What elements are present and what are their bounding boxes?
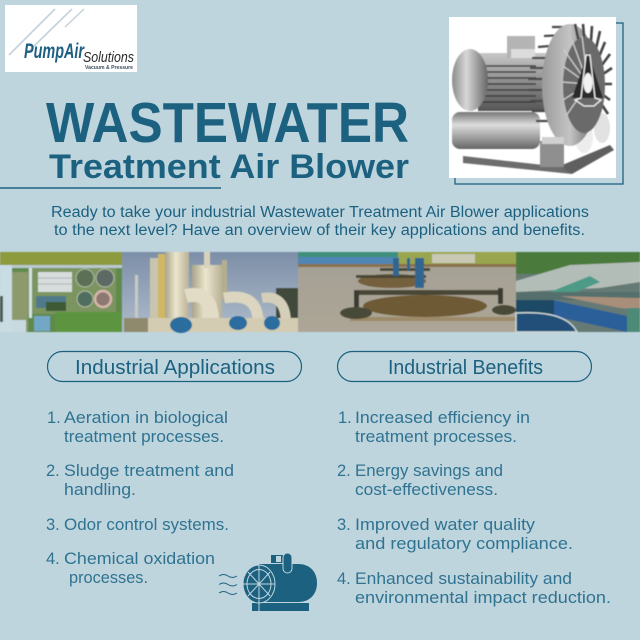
photo: aerial view of treatment plant: [0, 252, 122, 332]
logo: PumpAir Solutions: Vacuum & Pressure: [85, 65, 133, 71]
list: applications: Chemical oxidation: [64, 550, 215, 568]
heading: Industrial Benefits: Industrial Benefits: [388, 357, 543, 379]
title line: Treatment Air Blower: Treatment Air Blower: [49, 148, 409, 186]
photo strip: [0, 252, 640, 333]
fan housing side fins: [528, 27, 572, 121]
list: applications: 4.: [46, 550, 60, 568]
list: applications: 3.: [46, 516, 60, 534]
list: applications: treatment processes.: [64, 428, 224, 446]
list: applications: 1.: [47, 409, 61, 427]
icon: blower machine: [219, 553, 317, 611]
title line: WASTEWATER: WASTEWATER: [46, 91, 409, 155]
list: applications: Aeration in biological: [64, 409, 228, 427]
list: benefits: 2.: [337, 462, 351, 480]
list: benefits: 1.: [338, 409, 352, 427]
heading: Industrial Applications: Industrial Applications: [75, 357, 275, 379]
product photo: air blower: [449, 17, 623, 184]
list: benefits: Improved water quality: [355, 516, 536, 534]
intro paragraph: [51, 204, 589, 239]
list: benefits: Enhanced sustainability and: [355, 570, 572, 588]
list: applications: [46, 409, 234, 587]
photo: clarifier tanks: [516, 252, 640, 332]
intro paragraph: Ready to take your industrial Wastewater Treatment Air Blower applications: [51, 204, 589, 221]
logo: PumpAir Solutions: PumpAir: [24, 40, 85, 63]
logo: PumpAir Solutions: Solutions: [83, 49, 134, 66]
list: benefits: [337, 409, 611, 607]
photo: cream tanks and pipes: [122, 252, 298, 333]
title: [46, 91, 409, 186]
list: benefits: 4.: [337, 570, 351, 588]
list: benefits: treatment processes.: [355, 428, 517, 446]
intro paragraph: to the next level? Have an overview of their key applications and benefits.: [54, 222, 585, 239]
list: benefits: and regulatory compliance.: [355, 535, 573, 553]
list: applications: Odor control systems.: [64, 516, 229, 534]
list: applications: 2.: [46, 462, 60, 480]
panel: industrial applications: [46, 352, 302, 587]
heading: Industrial Benefits: [338, 352, 592, 382]
heading: Industrial Applications: [48, 352, 302, 382]
list: applications: Sludge treatment and: [64, 462, 234, 480]
list: benefits: Energy savings and: [355, 462, 503, 480]
list: benefits: cost-effectiveness.: [355, 481, 498, 499]
list: benefits: Increased efficiency in: [355, 409, 530, 427]
photo: aerators in sludge basin: [298, 252, 516, 332]
panel: industrial benefits: [337, 352, 611, 607]
list: benefits: 3.: [337, 516, 351, 534]
list: benefits: environmental impact reduction.: [355, 589, 611, 607]
list: applications: processes.: [69, 569, 148, 587]
logo: PumpAir Solutions: [5, 5, 137, 72]
list: applications: handling.: [64, 481, 136, 499]
